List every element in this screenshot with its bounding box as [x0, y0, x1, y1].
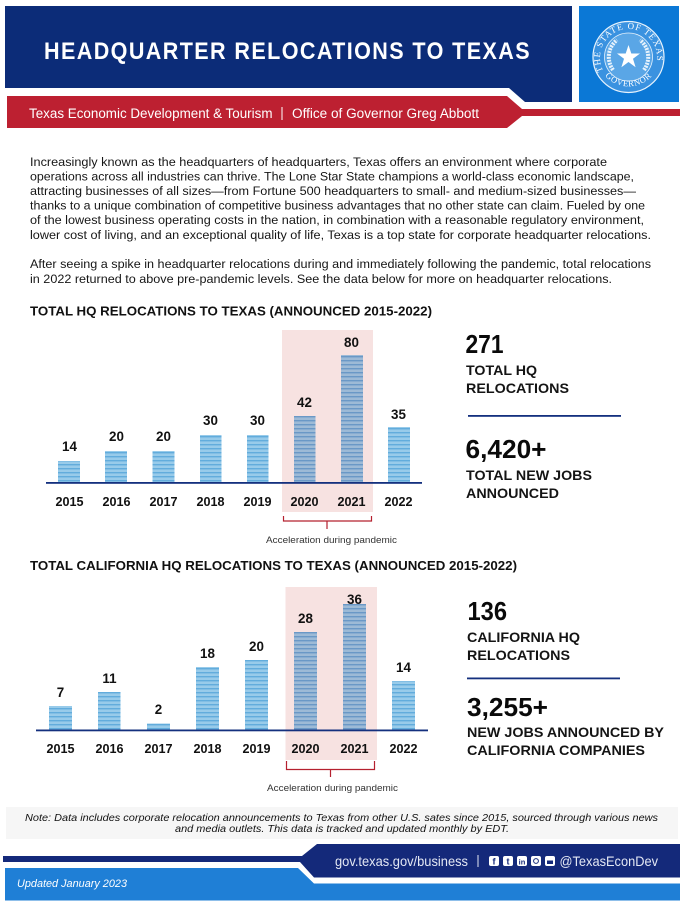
- bar chart: California relocations: 20: [249, 639, 264, 654]
- bracket: pandemic acceleration, chart 1: [266, 516, 397, 546]
- stat: total new jobs: TOTAL NEW JOBS: [466, 467, 592, 483]
- stat: California HQ relocations: [467, 596, 580, 663]
- bar chart: total HQ relocations: 42: [297, 395, 312, 410]
- governor seal panel: THE STATE OF TEXAS: [594, 23, 663, 74]
- note panel: [6, 807, 678, 839]
- bar chart: California relocations: 2016: [95, 742, 124, 756]
- bar chart: total HQ relocations: 20: [156, 429, 171, 444]
- note panel: and media outlets. This data is tracked and updated monthly by EDT.: [175, 823, 509, 835]
- bar chart: total HQ relocations: 2015: [55, 495, 84, 509]
- bar chart: California relocations: 2017: [144, 742, 173, 756]
- stat: total new jobs: 6,420+: [466, 434, 546, 464]
- bar chart: total HQ relocations: 35: [391, 407, 406, 422]
- header banner: [5, 6, 572, 102]
- footer navy band: @TexasEconDev: [560, 853, 658, 869]
- bracket: pandemic acceleration, chart 2: Acceleration during pandemic: [267, 783, 398, 794]
- bar chart: total HQ relocations: 20: [109, 429, 124, 444]
- bar chart: total HQ relocations: 30: [250, 413, 265, 428]
- footer blue band: Updated January 2023: [17, 878, 128, 890]
- intro paragraph: of the lowest business operating costs in the nation, in combination with a reasonable regulatory environment,: [30, 213, 644, 227]
- intro paragraph: Increasingly known as the headquarters of headquarters, Texas offers an environment where corporate: [30, 155, 607, 169]
- stat: California HQ relocations: 136: [468, 596, 507, 626]
- bar chart: total HQ relocations: 14: [62, 439, 77, 454]
- bar chart: total HQ relocations: 2020: [290, 495, 319, 509]
- footer blue band: [5, 868, 680, 900]
- social icons: [489, 856, 555, 866]
- stat: total new jobs: ANNOUNCED: [466, 485, 559, 501]
- stat: California new jobs: CALIFORNIA COMPANIES: [467, 742, 645, 758]
- bar chart: total HQ relocations: 2022: [384, 495, 413, 509]
- intro paragraph: operations across all industries can thrive. The Lone Star State champions a world-class economic landscape,: [30, 170, 634, 184]
- stat: total HQ relocations: RELOCATIONS: [466, 380, 569, 396]
- bar chart: California relocations: 2019: [242, 742, 271, 756]
- subtitle ribbon: Texas Economic Development & Tourism: [29, 106, 272, 121]
- bar chart: California relocations: 2022: [389, 742, 418, 756]
- bar chart: total HQ relocations: 80: [344, 335, 359, 350]
- bar chart: California relocations: 7: [57, 685, 64, 700]
- bar chart: total HQ relocations: 2016: [102, 495, 131, 509]
- title: HEADQUARTER RELOCATIONS TO TEXAS: [44, 38, 531, 65]
- intro paragraph: [30, 155, 651, 242]
- bar chart: California relocations: [36, 587, 428, 760]
- bracket: pandemic acceleration, chart 2: [267, 761, 398, 794]
- footer navy band: gov.texas.gov/business: [335, 853, 468, 869]
- bar chart: California relocations: 2020: [291, 742, 320, 756]
- stat: California new jobs: [467, 692, 665, 758]
- governor seal panel: GOVERNOR: [606, 73, 652, 86]
- stat: total HQ relocations: 271: [466, 329, 504, 359]
- bar chart: total HQ relocations: 2018: [196, 495, 225, 509]
- second paragraph: in 2022 returned to above pre-pandemic levels. See the data below for more on headquarter relocations.: [30, 272, 612, 286]
- stat: California new jobs: 3,255+: [467, 692, 548, 722]
- bar chart: total HQ relocations: 2019: [243, 495, 272, 509]
- social icons: f: [492, 856, 496, 866]
- social icons: t: [506, 856, 510, 866]
- bracket: pandemic acceleration, chart 1: Acceleration during pandemic: [266, 535, 397, 546]
- bar chart: California relocations: 2021: [340, 742, 369, 756]
- divider line: [468, 415, 621, 417]
- note panel: Note: Data includes corporate relocation announcements to Texas from other U.S. sates since 2015, sourced through various news: [25, 812, 659, 824]
- bar chart: California relocations: 14: [396, 660, 411, 675]
- bar chart: California relocations: 11: [102, 671, 117, 686]
- bar chart: total HQ relocations: [46, 330, 422, 512]
- stat: total HQ relocations: [466, 329, 569, 396]
- heading: total HQ relocations: TOTAL HQ RELOCATIONS TO TEXAS (ANNOUNCED 2015-2022): [30, 304, 432, 318]
- bar chart: total HQ relocations: 2021: [337, 495, 366, 509]
- bar chart: California relocations: 18: [200, 646, 215, 661]
- bar chart: California relocations: 2: [155, 702, 162, 717]
- stat: total new jobs: [466, 434, 592, 501]
- governor seal panel: [579, 6, 679, 102]
- bar chart: California relocations: 2018: [193, 742, 222, 756]
- intro paragraph: lower cost of living, and an exceptional quality of life, Texas is a top state for corporate headquarter relocations.: [30, 228, 651, 242]
- intro paragraph: attracting businesses of all sizes—from Fortune 500 headquarters to small- and medium-sized businesses—: [30, 184, 637, 198]
- bar chart: California relocations: 36: [347, 592, 362, 607]
- stat: California new jobs: NEW JOBS ANNOUNCED BY: [467, 724, 665, 740]
- bar chart: California relocations: 28: [298, 611, 313, 626]
- stat: California HQ relocations: CALIFORNIA HQ: [467, 629, 580, 645]
- footer navy band: [3, 844, 680, 878]
- subtitle ribbon: [7, 96, 680, 128]
- social icons: in: [519, 858, 526, 866]
- bar chart: California relocations: 2015: [46, 742, 75, 756]
- subtitle ribbon: Office of Governor Greg Abbott: [292, 106, 479, 121]
- bar chart: total HQ relocations: 2017: [149, 495, 178, 509]
- divider line: [467, 678, 620, 679]
- heading: California relocations: TOTAL CALIFORNIA HQ RELOCATIONS TO TEXAS (ANNOUNCED 2015-2022): [30, 559, 517, 573]
- second paragraph: After seeing a spike in headquarter relocations during and immediately following the pandemic, total relocations: [30, 257, 651, 271]
- stat: California HQ relocations: RELOCATIONS: [467, 647, 570, 663]
- second paragraph: [30, 257, 651, 286]
- bar chart: total HQ relocations: 30: [203, 413, 218, 428]
- intro paragraph: thanks to a unique combination of competitive business advantages that no other state can claim. Fueled by one: [30, 198, 645, 212]
- stat: total HQ relocations: TOTAL HQ: [466, 362, 537, 378]
